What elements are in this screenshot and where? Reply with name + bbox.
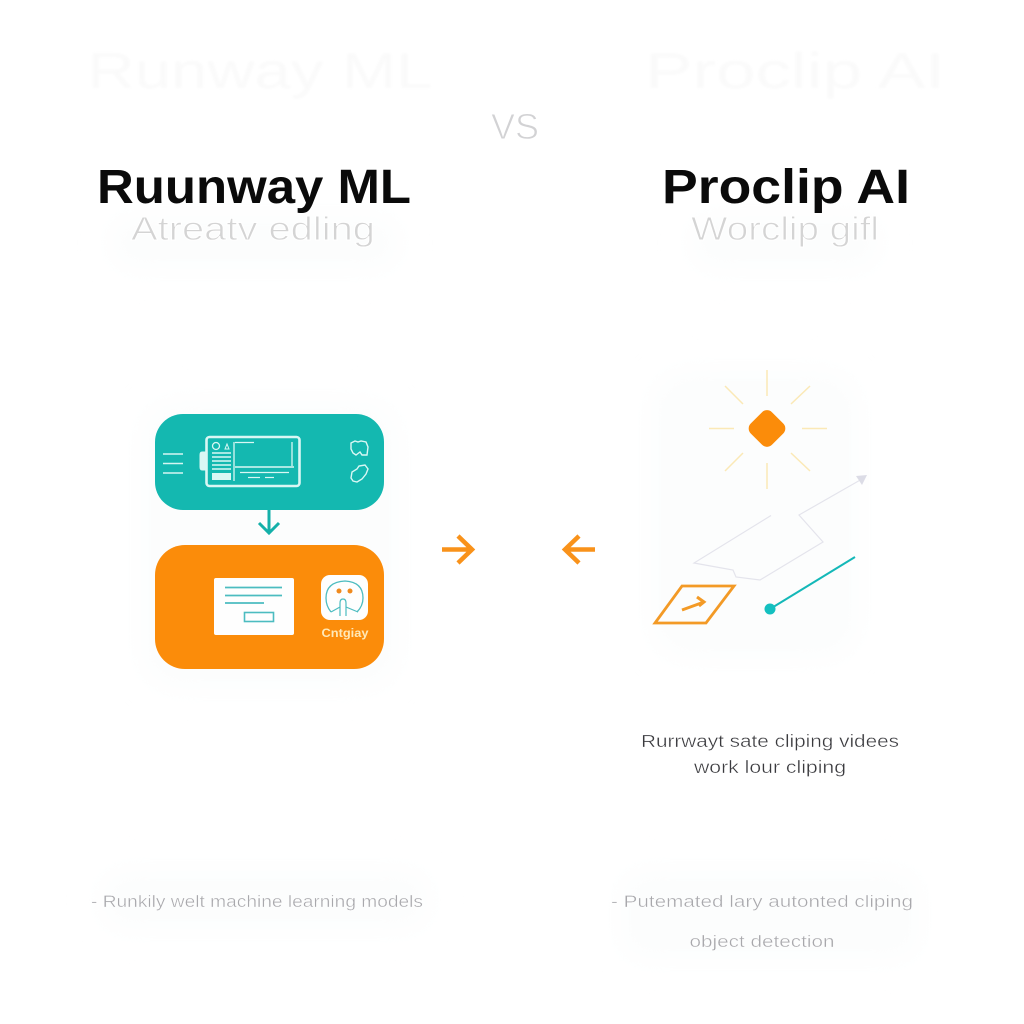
bullet: right line two: object detection <box>690 933 834 951</box>
icon: app face <box>321 575 368 620</box>
arrow: teal down <box>259 510 279 533</box>
icon: menu lines <box>163 454 183 473</box>
icon: sun with rays <box>709 370 827 489</box>
subheading: left: Atreatv edling <box>131 210 375 247</box>
white document card <box>214 578 294 635</box>
heading: Proclip AI: Proclip AI <box>662 161 910 214</box>
panel: teal interface card <box>155 414 384 510</box>
arrow: orange left <box>565 536 595 563</box>
icon: orange parallelogram <box>655 586 734 623</box>
icon: small outline shapes <box>351 441 368 482</box>
icon: outline path arrow <box>694 475 867 580</box>
faint ghost title left: Runway ML <box>88 43 432 99</box>
caption text: work lour cliping <box>693 757 846 777</box>
bullet: left: - Runkily welt machine learning models <box>91 893 423 911</box>
soft background halos <box>100 215 920 960</box>
faint ghost title right: Proclip AI <box>645 43 945 99</box>
caption text <box>641 731 899 777</box>
heading: Runway ML: Ruunway ML <box>97 161 411 214</box>
icon: device screen <box>200 437 300 486</box>
vs label: VS <box>491 106 539 147</box>
subheading: right: Worclip gifl <box>691 210 879 247</box>
caption text: Rurrwayt sate cliping videes <box>641 731 899 751</box>
arrow: orange right <box>442 536 472 563</box>
bullet: right: - Putemated lary autonted cliping <box>611 893 913 911</box>
panel: orange output card <box>155 545 384 669</box>
icon: teal line with dot <box>764 557 855 614</box>
app label: Cntgiay <box>322 628 369 640</box>
